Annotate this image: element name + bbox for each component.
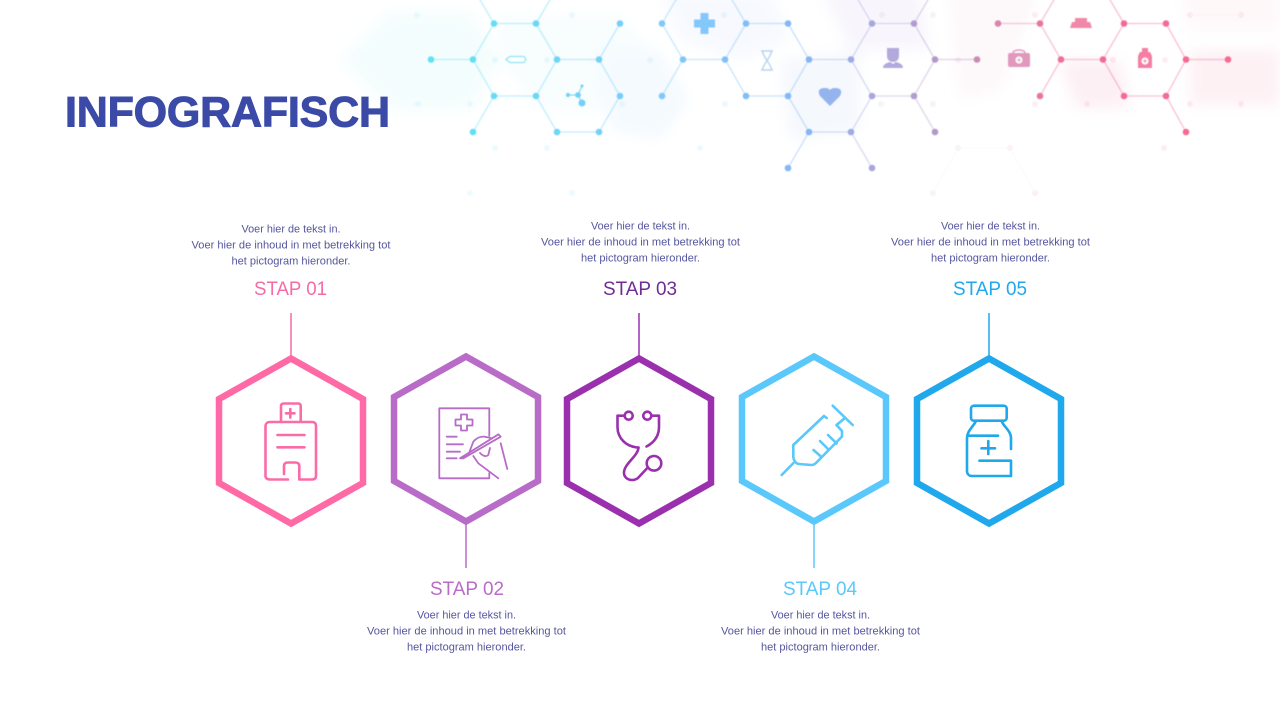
step 02 heading: STAP 02 xyxy=(430,579,504,600)
step 05 connector xyxy=(988,313,990,357)
step 01 description xyxy=(192,224,390,268)
step 03 description: Voer hier de inhoud in met betrekking tot xyxy=(541,236,740,248)
step 04 description xyxy=(721,610,920,654)
step 01 description: het pictogram hieronder. xyxy=(232,256,350,268)
lattice icon: plus xyxy=(694,13,715,34)
step 04 description: Voer hier de tekst in. xyxy=(771,610,870,622)
lattice icon: hourglass xyxy=(761,51,773,70)
icon: syringe xyxy=(782,406,853,475)
step 03 heading: STAP 03 xyxy=(603,279,677,300)
step 01 hexagon xyxy=(219,358,363,524)
step 05 description: Voer hier de inhoud in met betrekking tot xyxy=(891,236,1090,248)
lattice icon: first aid bag xyxy=(1008,50,1030,67)
step 01 connector xyxy=(290,313,292,357)
step 04 hexagon xyxy=(742,356,886,522)
title: INFOGRAFISCH xyxy=(65,88,390,136)
step 03 description: Voer hier de tekst in. xyxy=(591,220,690,232)
step 04 description: het pictogram hieronder. xyxy=(761,642,880,654)
background: ghost molecular nodes xyxy=(414,12,1244,196)
background: hexagon molecular lattice xyxy=(428,0,1231,171)
lattice icon: medicine bottle xyxy=(1138,48,1152,68)
icon: stethoscope xyxy=(618,412,661,480)
icon: medicine jar xyxy=(967,406,1011,476)
step 02 description: Voer hier de tekst in. xyxy=(417,610,516,622)
step 02 description: het pictogram hieronder. xyxy=(407,642,526,654)
icon: prescription with writing hand xyxy=(439,408,507,478)
lattice icon: pharmacy group xyxy=(1070,18,1092,28)
step 04 description: Voer hier de inhoud in met betrekking tot xyxy=(721,626,920,638)
step 05 hexagon xyxy=(917,358,1061,524)
lattice icon: capsule xyxy=(506,56,526,62)
step 01 description: Voer hier de tekst in. xyxy=(242,224,340,236)
lattice icon: heart xyxy=(819,88,841,106)
step 03 hexagon xyxy=(567,358,711,524)
step 03 connector xyxy=(638,313,640,357)
step 05 description: het pictogram hieronder. xyxy=(931,252,1050,264)
step 03 description xyxy=(541,220,740,264)
step 02 hexagon xyxy=(394,356,538,522)
step 01 description: Voer hier de inhoud in met betrekking tot xyxy=(192,240,390,252)
step 01 heading: STAP 01 xyxy=(254,279,327,300)
step 04 heading: STAP 04 xyxy=(783,579,857,600)
step 02 description: Voer hier de inhoud in met betrekking tot xyxy=(367,626,566,638)
step 02 description xyxy=(367,610,566,654)
icon: hospital xyxy=(266,404,316,480)
background: soft hexagon glow xyxy=(340,0,1280,140)
step 03 description: het pictogram hieronder. xyxy=(581,252,700,264)
lattice icon: molecule xyxy=(566,85,585,106)
step 02 connector xyxy=(465,524,467,568)
step 05 heading: STAP 05 xyxy=(953,279,1027,300)
step 04 connector xyxy=(813,524,815,568)
step 05 description xyxy=(891,220,1090,264)
step 05 description: Voer hier de tekst in. xyxy=(941,220,1040,232)
lattice icon: doctor xyxy=(883,48,903,68)
